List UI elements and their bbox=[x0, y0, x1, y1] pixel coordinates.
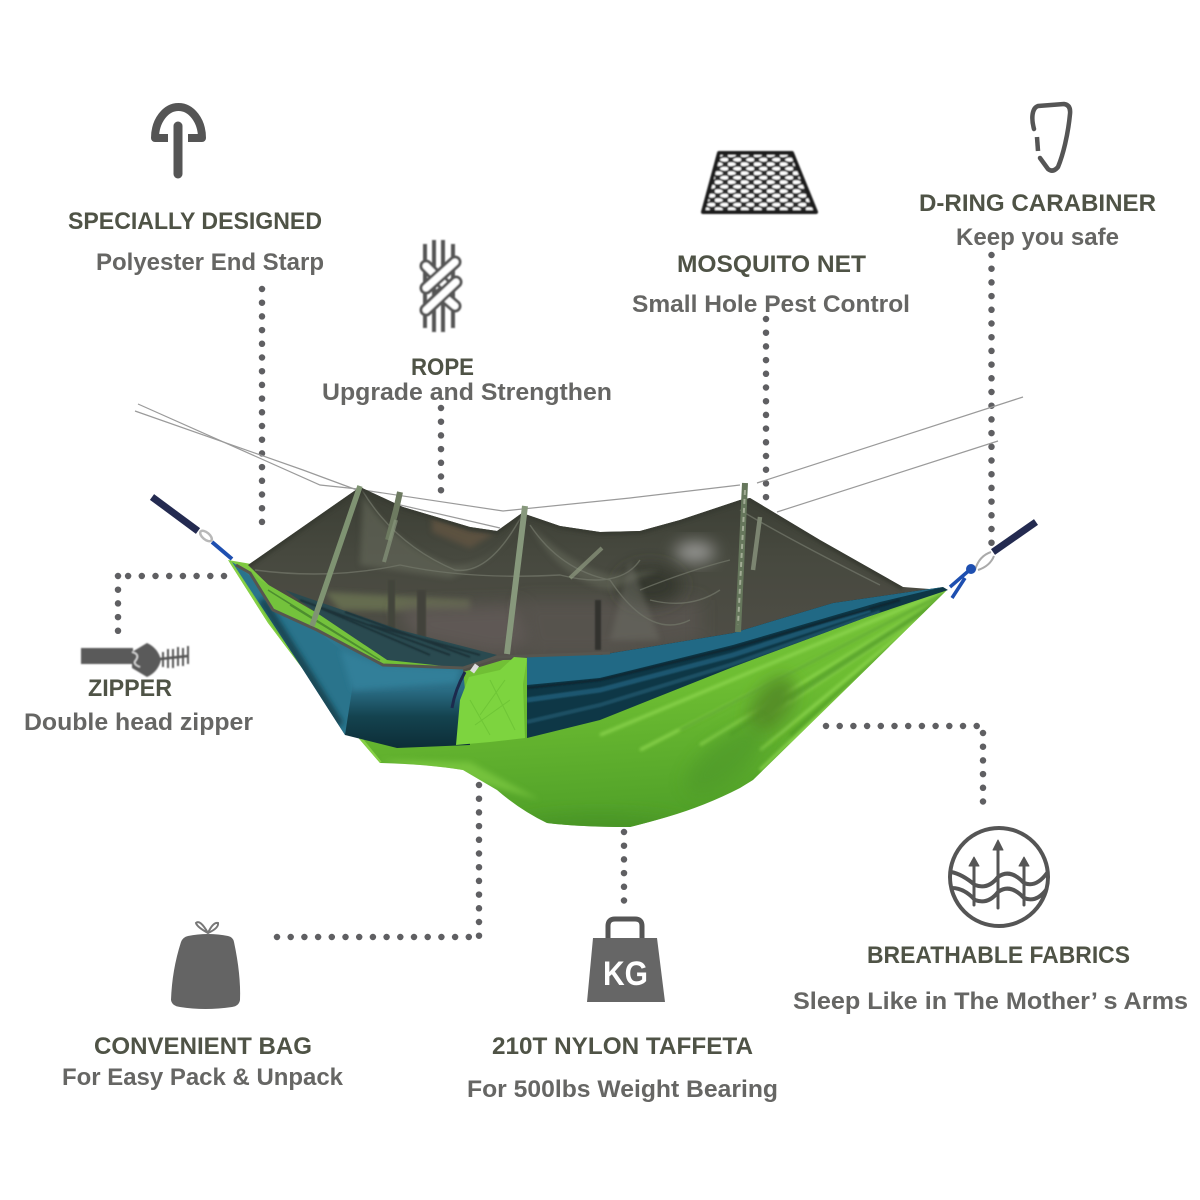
heading: convenient bag: CONVENIENT BAG bbox=[94, 1033, 312, 1060]
leader line: rope bbox=[438, 408, 444, 492]
heading: mosquito net: MOSQUITO NET bbox=[677, 251, 866, 278]
hammock bottom: green fabric bbox=[228, 560, 947, 842]
text: sleep like in the mother's arms: Sleep Like in The Mother’ s Arms bbox=[793, 988, 1188, 1015]
text: keep you safe: Keep you safe bbox=[956, 224, 1119, 251]
hammock side panel: teal fabric bbox=[228, 558, 960, 753]
heading: rope: ROPE bbox=[411, 354, 474, 381]
heading: specially designed: SPECIALLY DESIGNED bbox=[68, 208, 322, 235]
icon: breathable fabric bbox=[950, 828, 1048, 926]
icon: storage bag bbox=[171, 922, 240, 1009]
icon: zipper bbox=[81, 643, 188, 677]
hammock bbox=[152, 483, 1036, 842]
icon: mosquito net bbox=[703, 153, 816, 212]
hammock mesh canopy bbox=[248, 487, 943, 672]
icon: polyester end strap bbox=[155, 107, 202, 174]
text: double head zipper: Double head zipper bbox=[24, 709, 253, 736]
leader line: mosquito net bbox=[763, 319, 769, 498]
leader line: zipper bbox=[118, 576, 224, 636]
text: small hole pest control: Small Hole Pest Control bbox=[632, 291, 910, 318]
text: 500lbs weight bearing: For 500lbs Weight Bearing bbox=[467, 1076, 778, 1103]
leader line: breathable fabric bbox=[826, 726, 983, 802]
heading: 210T nylon taffeta: 210T NYLON TAFFETA bbox=[492, 1033, 753, 1060]
heading: zipper: ZIPPER bbox=[88, 675, 172, 702]
hammock left strap and carabiner bbox=[152, 497, 232, 559]
leader line: nylon taffeta bbox=[621, 832, 627, 905]
hammock storage pouch bbox=[452, 657, 527, 745]
text: for easy pack and unpack: For Easy Pack & Unpack bbox=[62, 1064, 343, 1091]
text: upgrade and strengthen: Upgrade and Strengthen bbox=[322, 379, 612, 406]
heading: breathable fabrics: BREATHABLE FABRICS bbox=[867, 942, 1130, 969]
hammock interior floor with green stripes bbox=[250, 570, 497, 668]
hammock right strap and carabiner bbox=[950, 522, 1036, 598]
leader line: carabiner bbox=[988, 255, 995, 545]
suspension lines bbox=[135, 397, 1023, 528]
leader line: strap to hammock bbox=[259, 289, 265, 522]
heading: d-ring carabiner: D-RING CARABINER bbox=[919, 190, 1156, 217]
icon: carabiner bbox=[1032, 104, 1070, 171]
icon: weight bbox=[587, 919, 665, 1002]
hammock mosquito net support straps bbox=[312, 483, 760, 654]
text: polyester end strap: Polyester End Starp bbox=[96, 249, 324, 276]
icon: braided rope bbox=[425, 240, 456, 332]
leader line: convenient bag bbox=[277, 785, 479, 937]
hammock mosquito net hem and zipper bbox=[236, 565, 610, 668]
icon: weight: KG bbox=[603, 955, 648, 993]
